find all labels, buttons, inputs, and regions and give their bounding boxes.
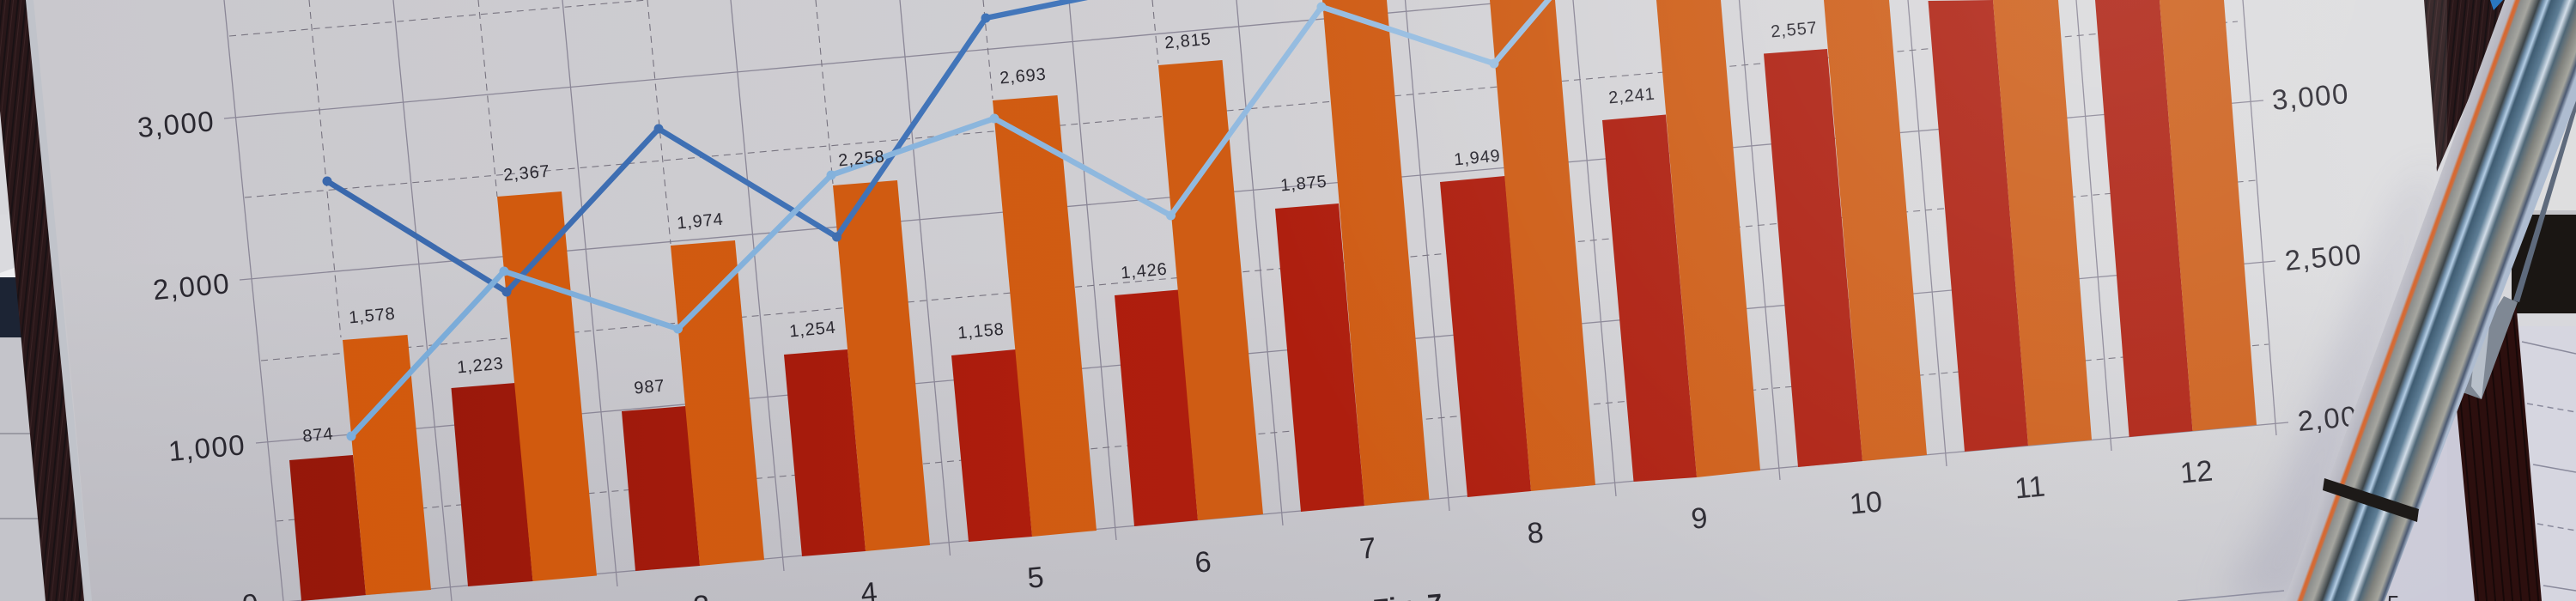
right axis labels [2270,77,2376,437]
bar value labels: 1,158 [957,320,1005,343]
bar value labels: 1,254 [788,319,837,341]
bar value labels: 874 [301,424,334,446]
pen shadow on paper [2235,195,2425,601]
pen ring [2323,478,2419,522]
bar value labels: 2,367 [502,162,551,185]
line series: light blue [347,0,1563,441]
category axis labels [692,454,2215,601]
icon: blue object peeking at top [2490,0,2503,10]
left axis labels: 2,000 [152,267,232,306]
bar value labels: 1,875 [1279,173,1328,195]
bar value labels: 2,815 [1163,30,1212,52]
left axis labels [137,105,261,601]
category axis labels: 6 [1194,545,1212,580]
paper edge strip [26,0,93,601]
bars: orange series [343,0,2257,595]
pen clip rods [2463,97,2576,399]
category axis labels: 11 [2014,470,2046,506]
clipboard frame: right edge behind pen [2421,0,2512,172]
lower page details [2178,591,2399,601]
pen barrel [2284,0,2576,601]
category axis labels: 5 [1026,561,1045,595]
line series: dark blue [323,0,1108,297]
brown strap below the pen [2456,300,2542,601]
category axis labels: 10 [1848,485,1884,521]
bar value labels: 2,241 [1607,85,1656,107]
bar value labels: 987 [633,376,665,398]
bar value labels [301,19,1819,446]
clipboard frame: left edge [0,0,85,601]
bar value labels: 1,949 [1453,147,1502,169]
category axis labels: 12 [2178,454,2215,490]
bar value labels: 2,258 [837,148,886,170]
right axis labels: 2,000 [2296,398,2376,437]
paper bottom shading [60,258,2430,601]
left axis labels: 3,000 [137,105,216,143]
category axis labels: 7 [1358,531,1377,566]
bars: red series [289,0,2193,601]
bar value labels: 2,693 [999,65,1048,88]
bar value labels: 1,578 [348,305,397,327]
vertical solid grid lines [224,0,2276,601]
dashed grid lines [229,0,2269,521]
category axis labels: 8 [1526,516,1545,550]
right axis labels: 2,500 [2283,238,2363,276]
bar value labels: 1,426 [1120,260,1169,282]
bar value labels: 1,974 [676,210,725,233]
left axis labels: 1,000 [167,428,247,467]
bar value labels: 1,223 [456,355,505,377]
bar value labels: 2,557 [1770,19,1819,41]
pen [2284,0,2576,601]
right axis labels: 3,000 [2270,77,2350,116]
category axis labels: 9 [1690,501,1709,536]
